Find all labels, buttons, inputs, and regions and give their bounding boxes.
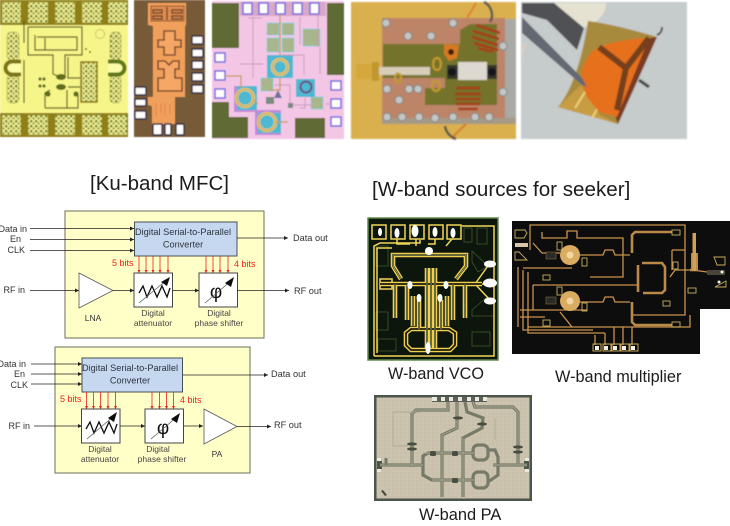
second data out: Data out (271, 369, 306, 379)
second control inputs: En (14, 369, 25, 379)
red control bits (112, 256, 256, 273)
diagram: Ku-band MFC with PA (0, 347, 306, 473)
caption: W-band VCO: W-band VCO (388, 365, 484, 383)
second RF path and RF out: RF out (274, 420, 302, 430)
photo: orange filter die (134, 0, 205, 137)
serial-to-parallel converter block: Digital Serial-to-Parallel (135, 227, 231, 237)
second panel background (55, 347, 250, 473)
red control bits: 4 bits (234, 259, 256, 269)
RF signal path and RF out: RF out (294, 286, 322, 296)
diagram panel background (65, 211, 264, 338)
second attenuator block: attenuator (81, 454, 119, 464)
control inputs: En (10, 234, 21, 244)
diagram: Ku-band MFC with LNA (0, 211, 328, 338)
second control inputs: RF in (8, 421, 30, 431)
caption: W-band PA: W-band PA (419, 506, 501, 524)
second phase shifter block: φ (157, 418, 169, 439)
PA triangle (204, 409, 237, 459)
caption: W-band multiplier: W-band multiplier (555, 368, 682, 386)
data out arrow and label (237, 233, 328, 243)
heading: W-band sources for seeker: [W-band sources for seeker] (372, 178, 630, 201)
second control inputs (0, 359, 82, 431)
control inputs (0, 224, 134, 295)
second data out (183, 369, 306, 379)
second control inputs: CLK (10, 380, 28, 390)
serial-to-parallel converter block: Converter (163, 240, 203, 250)
second serial-to-parallel converter: Converter (110, 376, 150, 386)
photo: flexible circuit held by tweezers (521, 2, 687, 139)
control inputs: CLK (7, 245, 25, 255)
second phase shifter block (138, 409, 187, 464)
LNA triangle (79, 273, 113, 323)
digital phase shifter block (195, 273, 244, 328)
photo: amplifier test board (351, 2, 516, 139)
digital attenuator block: attenuator (134, 318, 172, 328)
photo: W-band PA die (374, 395, 532, 501)
heading: Ku-band MFC: [Ku-band MFC] (90, 172, 229, 195)
second red control bits: 4 bits (180, 395, 202, 405)
LNA triangle: LNA (85, 313, 102, 323)
second attenuator block (81, 409, 120, 464)
digital phase shifter block: φ (210, 282, 222, 303)
photo: W-band multiplier die (512, 221, 730, 354)
photo: yellow MMIC die (0, 0, 128, 137)
digital phase shifter block: phase shifter (195, 318, 244, 328)
second serial-to-parallel converter (82, 358, 182, 392)
data out arrow and label: Data out (293, 233, 328, 243)
serial-to-parallel converter block (134, 222, 237, 256)
second phase shifter block: phase shifter (138, 454, 187, 464)
digital attenuator block (134, 273, 172, 328)
second serial-to-parallel converter: Digital Serial-to-Parallel (82, 363, 178, 373)
photo: W-band VCO die (368, 218, 498, 360)
second attenuator block: Digital (88, 444, 112, 454)
second red control bits: 5 bits (60, 394, 82, 404)
photo: pink RF die (212, 1, 344, 139)
red control bits: 5 bits (112, 258, 134, 268)
second red control bits (60, 392, 202, 409)
second phase shifter block: Digital (146, 444, 170, 454)
control inputs: RF in (3, 285, 25, 295)
digital attenuator block: Digital (141, 308, 165, 318)
digital phase shifter block: Digital (207, 308, 231, 318)
PA triangle: PA (212, 449, 223, 459)
